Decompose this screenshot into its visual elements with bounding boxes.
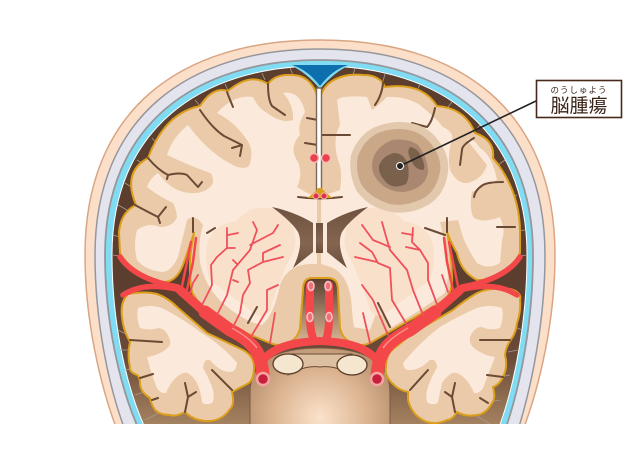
left temporal cortex (122, 292, 254, 421)
head and brain (85, 40, 555, 430)
left upper artery (180, 290, 207, 314)
right white matter (321, 96, 504, 330)
left middle cerebral artery (205, 312, 263, 377)
right upper artery (433, 290, 460, 314)
label: brain tumor (536, 80, 622, 118)
tumor (350, 122, 448, 213)
layer: skull (95, 49, 545, 430)
left ascending branches (182, 238, 196, 290)
left basal ganglia (206, 208, 296, 316)
right branches (460, 257, 520, 295)
artery cross-sections (257, 282, 383, 385)
third ventricle (316, 223, 323, 253)
brain cross-section illustration (84, 39, 622, 424)
right temporal cortex (386, 288, 520, 423)
circle of Willis (265, 341, 375, 358)
label text: 脳腫瘍 (550, 95, 608, 117)
left temporal white matter (137, 306, 237, 404)
medial vessels (307, 154, 333, 199)
left temporal lobe (122, 292, 254, 421)
anterior section 3 (307, 312, 313, 322)
left ventricle horn (272, 207, 313, 268)
left branches (120, 257, 180, 295)
anterior section 4 (326, 312, 332, 322)
tumor outer ring (350, 122, 448, 213)
brainstem (250, 348, 390, 430)
brainstem nuclei (273, 354, 367, 375)
hemisphere cortex (119, 75, 520, 345)
venous sinus outline (293, 66, 347, 88)
anterior section 1 (308, 282, 314, 290)
layer: scalp (85, 40, 555, 430)
medial vessel right (322, 154, 330, 162)
layer: inner skull line (105, 60, 533, 430)
lower vessel left (313, 193, 319, 199)
left white matter (135, 93, 317, 325)
small arterial branches (190, 222, 448, 343)
central arch cortex (278, 265, 362, 345)
right basal ganglia (344, 208, 434, 316)
right carotid section (371, 373, 383, 385)
cerebral hemispheres (119, 75, 520, 345)
layer: subarachnoid space (112, 66, 527, 430)
left oval (273, 354, 303, 374)
connecting band (288, 354, 352, 375)
arachnoid tick lines (112, 68, 527, 424)
right ventricle horn (327, 207, 368, 268)
anterior section 2 (325, 282, 331, 290)
pointer dot (396, 162, 404, 170)
central dark gap (290, 278, 350, 342)
falx cerebri (316, 88, 322, 197)
large arteries (120, 238, 520, 377)
right middle cerebral artery (377, 312, 435, 377)
sulci (130, 83, 515, 412)
artery highlights (232, 328, 408, 348)
medial vessel left (310, 154, 318, 162)
venous sinus (292, 65, 348, 86)
medial yellow mound (307, 188, 333, 198)
left carotid section (257, 373, 269, 385)
tumor secondary core (408, 147, 424, 170)
lateral ventricles (272, 207, 368, 268)
right temporal lobe (386, 288, 520, 423)
right temporal white matter (403, 306, 503, 404)
central fill (317, 199, 321, 201)
pointer line (396, 101, 536, 170)
leader line (400, 101, 536, 166)
tumor edema (357, 129, 440, 205)
tumor inner zone (372, 140, 428, 192)
right ascending branches (444, 238, 458, 290)
lower vessel right (321, 193, 327, 199)
right oval (337, 355, 367, 375)
tumor necrotic core (379, 153, 409, 186)
anterior cerebral arteries (310, 285, 329, 340)
furigana: のうしゅよう (550, 85, 608, 95)
label box (536, 80, 622, 118)
